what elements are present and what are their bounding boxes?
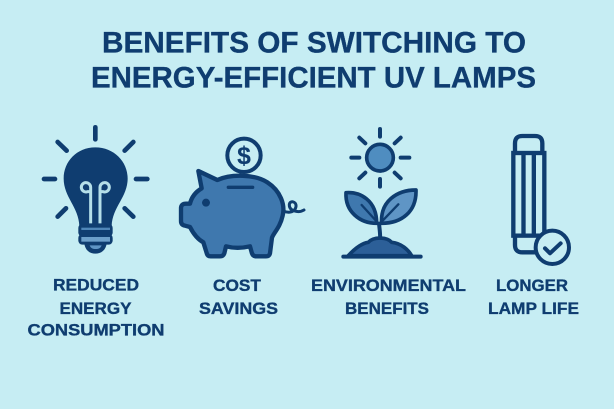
title — [91, 27, 536, 95]
label: cost savings: COST — [213, 276, 262, 295]
label: environmental benefits: ENVIRONMENTAL — [311, 276, 466, 295]
label: longer lamp life: LAMP LIFE — [488, 299, 579, 318]
label: longer lamp life: LONGER — [496, 276, 568, 295]
label: reduced energy consumption: CONSUMPTION — [28, 321, 164, 340]
label: reduced energy consumption: REDUCED — [53, 276, 139, 295]
label: cost savings: SAVINGS — [199, 299, 278, 318]
label: environmental benefits — [311, 276, 466, 318]
label: cost savings — [199, 276, 278, 318]
label: reduced energy consumption: ENERGY — [60, 299, 132, 318]
label: environmental benefits: BENEFITS — [345, 299, 429, 318]
title: BENEFITS OF SWITCHING TO — [102, 27, 526, 60]
icon: UV lamp with check badge — [513, 136, 569, 264]
label: longer lamp life — [488, 276, 579, 318]
icon: piggy bank with coin — [181, 139, 304, 256]
icon: piggy bank with coin: $ — [237, 143, 251, 170]
title: ENERGY-EFFICIENT UV LAMPS — [91, 62, 536, 95]
icon: light bulb — [44, 127, 147, 254]
icon: sun and plant — [343, 129, 421, 257]
label: reduced energy consumption — [28, 276, 164, 340]
